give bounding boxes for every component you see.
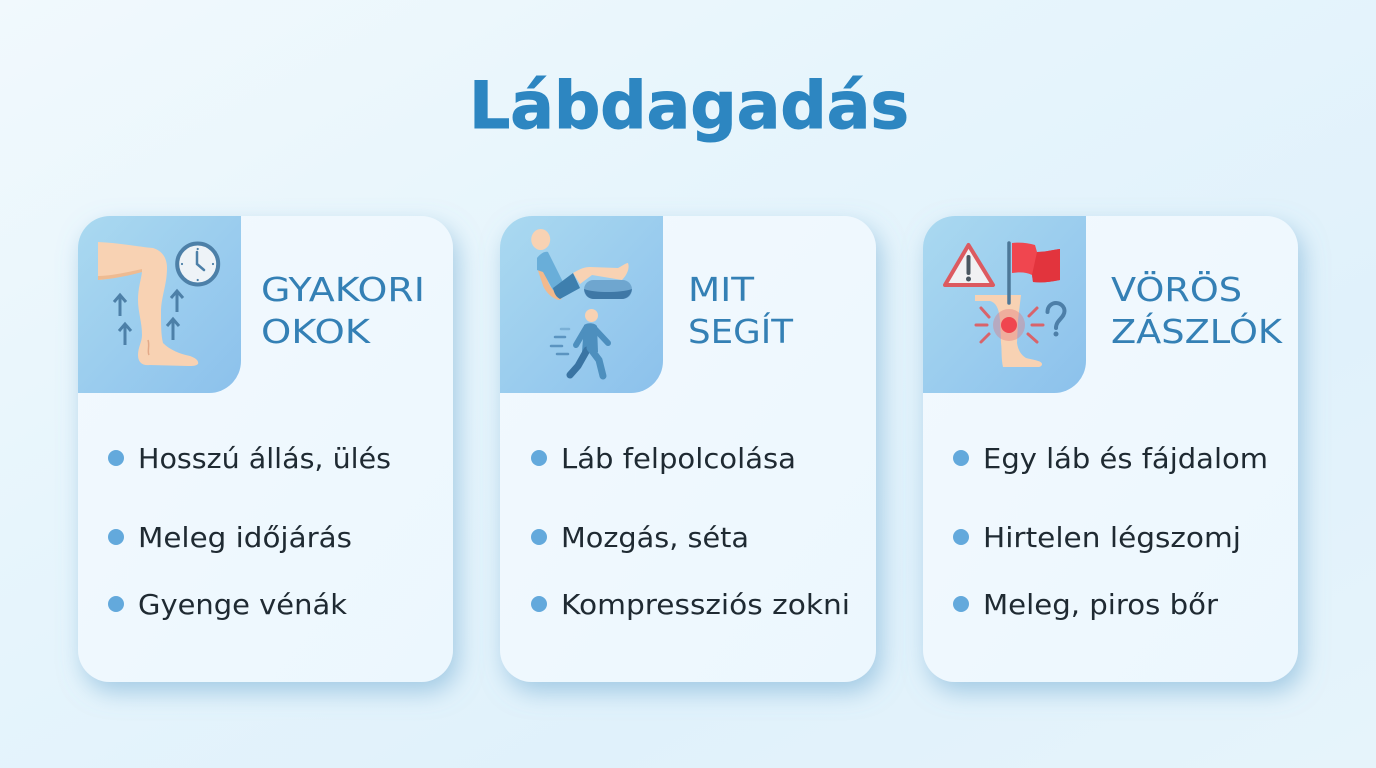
heading <box>688 270 794 351</box>
bullet list: Láb felpolcolása <box>561 442 796 475</box>
bullet list: Meleg, piros bőr <box>983 588 1219 621</box>
bullet list <box>953 442 1268 621</box>
bullet list: Meleg időjárás <box>138 521 352 554</box>
heading: MIT <box>688 270 755 309</box>
bullet list: Hosszú állás, ülés <box>138 442 391 475</box>
bullet list: Hirtelen légszomj <box>983 521 1241 554</box>
bullet list: Kompressziós zokni <box>561 588 850 621</box>
panel: mit segít <box>500 216 876 682</box>
heading <box>261 270 425 351</box>
panel: vörös zászlók <box>923 216 1298 682</box>
heading: SEGÍT <box>688 311 794 351</box>
bullet list: Mozgás, séta <box>561 521 749 554</box>
heading: ZÁSZLÓK <box>1111 311 1284 351</box>
heading: GYAKORI <box>261 270 425 309</box>
icon tile: raised leg and walking person <box>500 216 663 393</box>
heading <box>1111 269 1284 351</box>
bullet list <box>531 442 850 621</box>
title: Lábdagadás <box>469 69 909 144</box>
icon tile: leg, clock and arrows <box>78 216 241 393</box>
panel: gyakori okok <box>78 216 453 682</box>
icon tile: warning, red flag, painful leg <box>923 216 1086 393</box>
bullet list: Egy láb és fájdalom <box>983 442 1268 475</box>
heading: VÖRÖS <box>1111 269 1242 309</box>
bullet list: Gyenge vénák <box>138 588 348 621</box>
bullet list <box>108 442 391 621</box>
heading: OKOK <box>261 312 372 351</box>
